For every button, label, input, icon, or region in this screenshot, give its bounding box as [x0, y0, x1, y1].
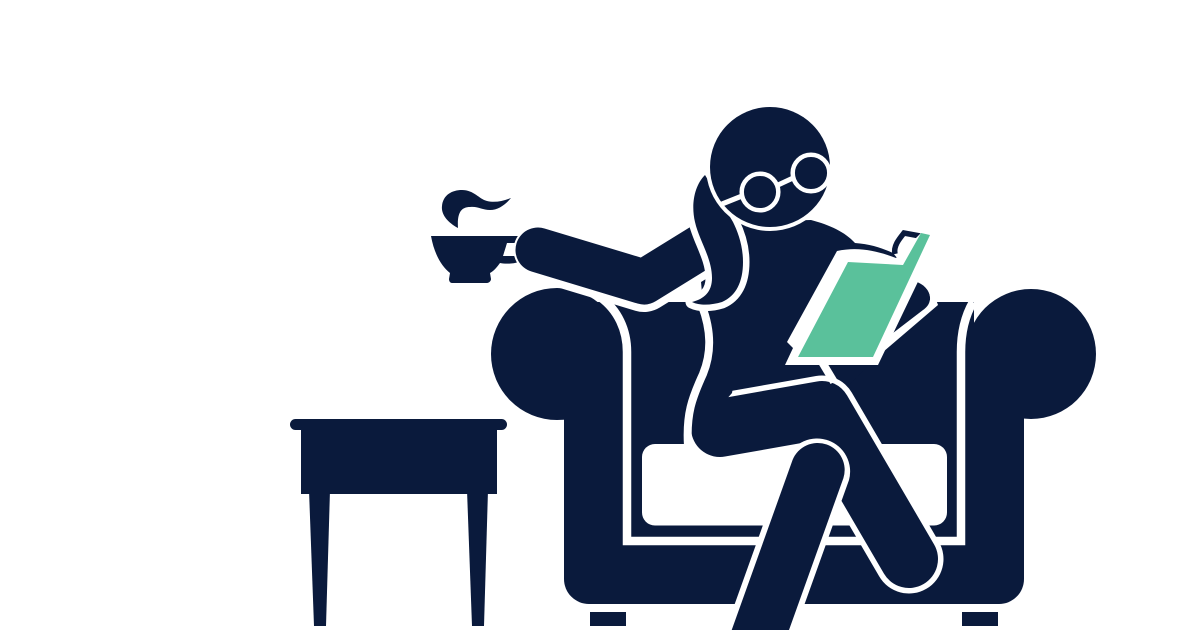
ponytail — [692, 175, 743, 305]
back leg — [720, 410, 909, 559]
outstretched arm holding cup — [514, 226, 712, 282]
glasses — [722, 155, 829, 210]
icon: coffee cup with steam — [431, 190, 518, 283]
icon: side table — [290, 419, 507, 626]
right arm outline behind book — [883, 282, 938, 352]
icon: armchair — [491, 288, 1096, 626]
arm outline — [538, 240, 712, 282]
head — [706, 103, 834, 231]
hand gripping book — [895, 233, 920, 254]
hip patch joining torso and thigh — [690, 375, 735, 430]
torso — [685, 220, 930, 440]
body outline on the left — [688, 306, 709, 446]
front leg — [725, 438, 850, 630]
book — [785, 232, 938, 365]
